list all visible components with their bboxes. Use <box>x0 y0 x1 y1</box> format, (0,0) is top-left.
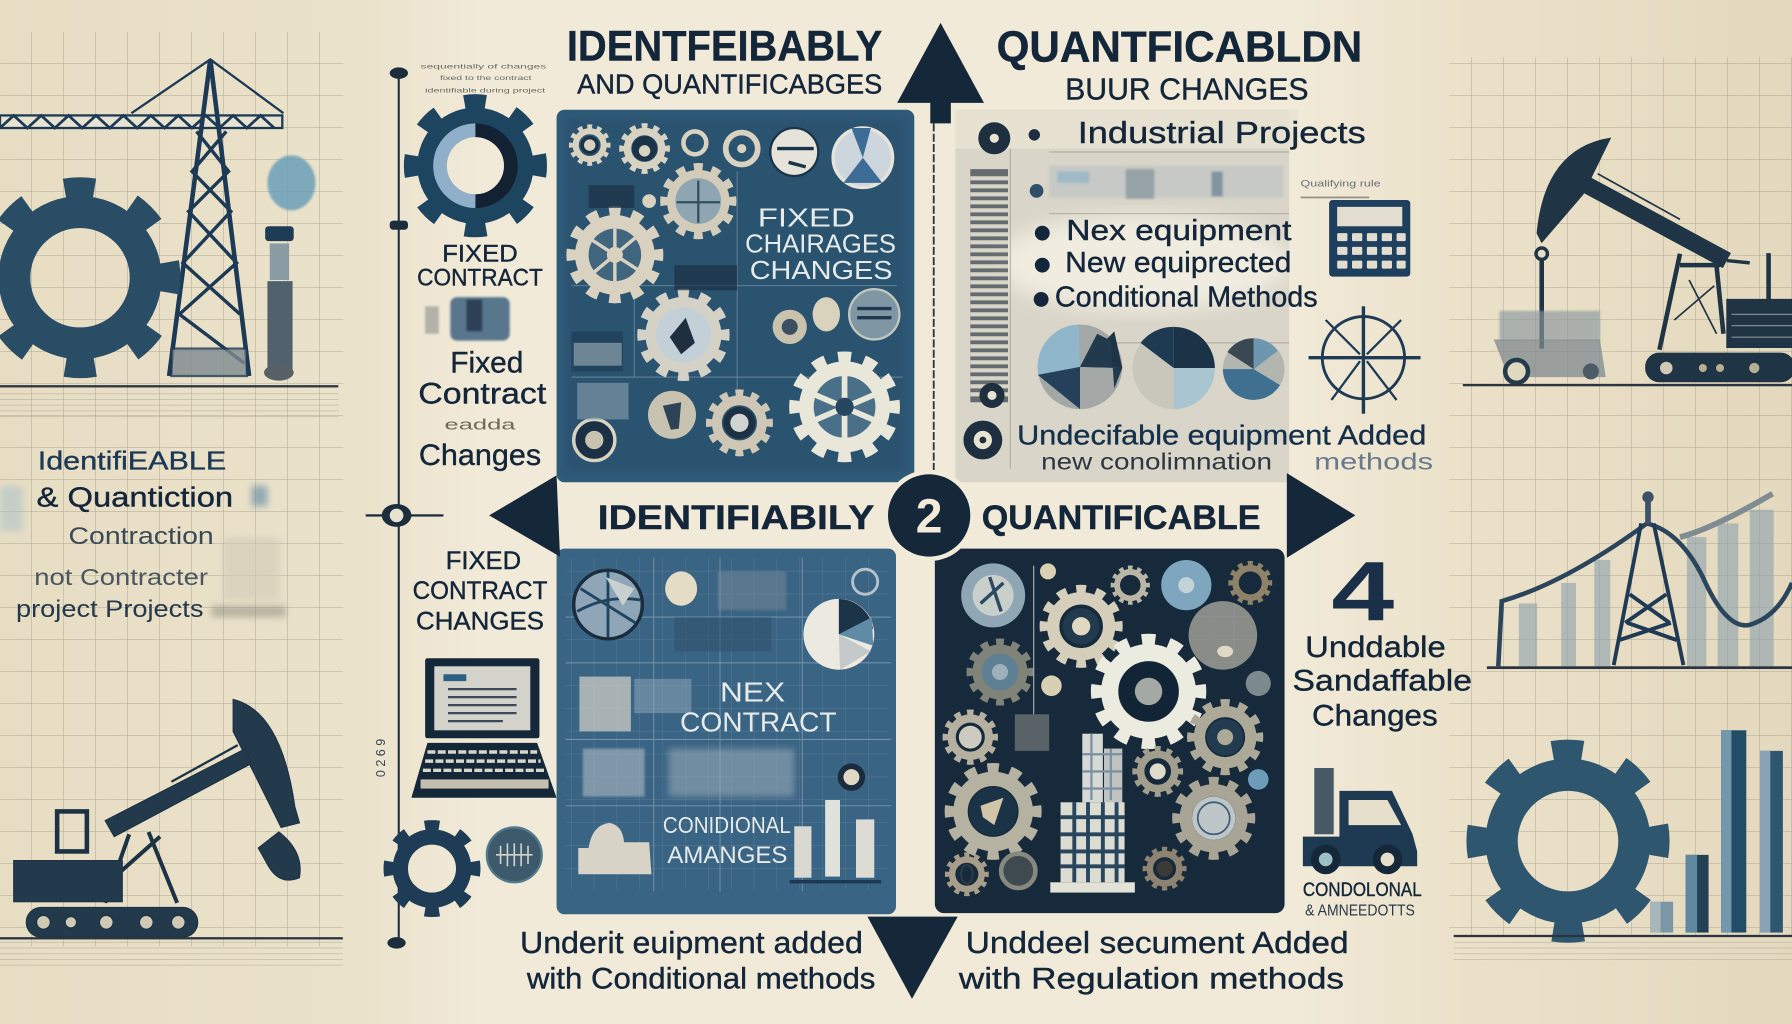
illustration: pumpjack upper right <box>1536 138 1792 382</box>
caption: unddeel secument <box>958 925 1349 996</box>
small discs <box>648 391 696 439</box>
chart disc <box>574 570 642 639</box>
number: 4: 4 <box>1331 544 1394 639</box>
label: undefined standard changes <box>1293 631 1472 733</box>
label: fixed contract changes lower: CONTRACT <box>413 577 547 605</box>
disc <box>838 763 865 791</box>
title: quantifiable: BUUR CHANGES <box>1065 71 1309 106</box>
icon: compass diagram <box>1309 306 1421 414</box>
tiny caption notes: sequentially of changes <box>421 64 547 71</box>
label: identifiably: IDENTIFIABILY <box>598 499 874 537</box>
label: fixed contract changes: eadda <box>445 418 517 434</box>
pie chart 2 <box>1133 327 1215 409</box>
panel text: conditional changes: CONIDIONAL <box>663 812 791 838</box>
ground line right bottom <box>1454 935 1792 937</box>
timeline: left vertical axis <box>366 67 443 949</box>
label: undefined standard changes: Unddable <box>1305 631 1446 664</box>
ground line right top <box>1463 384 1792 386</box>
list: equipment items: New equiprected <box>1065 247 1291 279</box>
text block: left side summary: IdentifiEABLE <box>38 446 226 476</box>
arrow: right <box>1287 473 1355 558</box>
illustration: pumpjack lower left <box>14 699 300 937</box>
illustration: chart with derrick <box>1498 491 1792 666</box>
panel text: fixed changes: CHANGES <box>750 255 893 285</box>
panel text: undecifable equipment: Undecifable equipment Added <box>1017 420 1426 451</box>
faded blueprint marks <box>0 486 286 617</box>
text block: left side summary: not Contracter <box>34 564 208 590</box>
label: conditional amendments <box>1303 879 1422 919</box>
tiny caption notes: identifiable during project <box>425 88 545 95</box>
label: fixed contract changes lower: CHANGES <box>416 608 544 636</box>
panel text: fixed changes: CHAIRAGES <box>745 229 896 259</box>
arrow: up <box>897 23 984 123</box>
small discs <box>853 569 878 594</box>
caption: underit equipment: Underit euipment added <box>520 925 863 960</box>
center badge: 2 <box>916 491 942 544</box>
panel text: new contract: CONTRACT <box>680 706 837 737</box>
notes right of top right panel <box>1301 178 1381 198</box>
faded cart <box>1494 311 1606 383</box>
icon: small gear <box>390 826 474 911</box>
icon: half gear <box>413 103 538 228</box>
building <box>1050 734 1135 893</box>
panel text: conditional changes: AMANGES <box>667 842 787 869</box>
panel text: undecifable equipment: methods <box>1314 449 1433 475</box>
panel: bottom right dark <box>935 549 1285 913</box>
title: identifiable: IDENTFEIBABLY <box>567 23 882 70</box>
panel: bottom left blue <box>557 549 896 914</box>
caption: unddeel secument: with Regulation methods <box>958 963 1344 996</box>
list: equipment items: Nex equipment <box>1066 215 1291 247</box>
panel: top right light <box>955 110 1433 482</box>
panel text: conditional changes <box>663 812 791 869</box>
pie chart 1 <box>1038 325 1122 409</box>
blob <box>665 571 697 606</box>
panel text: new contract: NEX <box>720 677 785 708</box>
cylinders <box>790 800 881 883</box>
icon: gauge disc <box>487 827 542 882</box>
barcode strip <box>970 169 1008 402</box>
arrow: down <box>867 917 958 999</box>
label: fixed contract changes: Fixed <box>450 347 523 380</box>
center badge <box>883 470 975 561</box>
caption: unddeel secument: Unddeel secument Added <box>966 925 1349 960</box>
label: quantifiable: QUANTIFICABLE <box>982 499 1261 537</box>
notes right of top right panel: Qualifying rule <box>1301 178 1381 188</box>
illustration: blue blob and chimney <box>264 155 315 381</box>
arrow: left <box>489 475 560 557</box>
panel text: fixed changes: FIXED <box>758 202 855 232</box>
title: identifiable <box>567 23 882 100</box>
list: equipment items <box>1034 215 1318 313</box>
text block: left side summary: project Projects <box>16 596 203 623</box>
illustration: large right gear <box>1479 753 1657 930</box>
ground line left top <box>0 385 338 387</box>
icon: truck <box>1303 768 1417 874</box>
vertical divider top <box>933 123 935 480</box>
caption: underit equipment: with Conditional methods <box>526 963 875 996</box>
text block: left side summary: & Quantiction <box>37 481 233 512</box>
label: conditional amendments: CONDOLONAL <box>1303 879 1422 901</box>
ground line left bottom <box>0 937 343 939</box>
illustration: crane tower <box>0 59 283 376</box>
timeline: left vertical axis: 0 2 6 9 <box>374 739 388 777</box>
large gears <box>665 168 731 234</box>
panel text: new contract <box>680 677 837 737</box>
label: fixed contract changes lower: FIXED <box>446 547 521 575</box>
text block: left side summary: Contraction <box>69 523 214 550</box>
icon: small machine <box>425 297 510 341</box>
label: undefined standard changes: Sandaffable <box>1293 664 1472 697</box>
label: conditional amendments: & AMNEEDOTTS <box>1305 902 1415 919</box>
pie chart 3 <box>1223 338 1285 400</box>
top row gears <box>572 126 893 187</box>
bar chart right <box>1650 730 1783 933</box>
pie chart white <box>803 599 874 670</box>
text block: left side summary <box>16 446 233 623</box>
faded blocks <box>579 571 794 797</box>
factory <box>578 823 651 874</box>
panel: top left blue <box>557 110 914 482</box>
icon: calculator <box>1329 200 1410 277</box>
label: fixed contract changes <box>418 347 547 472</box>
tiny caption notes <box>421 64 547 95</box>
label: fixed contract changes: Contract <box>418 377 547 410</box>
label: fixed contract upper: FIXED <box>442 241 518 268</box>
list: equipment items: Conditional Methods <box>1055 281 1318 313</box>
faded row <box>1049 166 1283 199</box>
illustration: large left gear <box>0 190 167 365</box>
label: fixed contract changes lower <box>413 547 547 636</box>
panel text: fixed changes <box>745 202 896 285</box>
panel icons: discs <box>963 122 1043 459</box>
title: quantifiable <box>997 24 1362 106</box>
icon: laptop <box>411 658 557 798</box>
label: fixed contract changes: Changes <box>419 439 541 472</box>
panel text: undecifable equipment <box>1017 420 1433 475</box>
heading: industrial projects: Industrial Projects <box>1078 115 1366 150</box>
title: identifiable: AND QUANTIFICABGES <box>577 69 882 100</box>
label: fixed contract upper <box>417 241 543 292</box>
small bar block <box>1015 714 1049 751</box>
title: quantifiable: QUANTFICABLDN <box>997 24 1362 72</box>
label: undefined standard changes: Changes <box>1312 700 1438 733</box>
caption: underit equipment <box>520 925 875 996</box>
gears <box>946 560 1271 893</box>
ground line right mid <box>1487 666 1792 669</box>
label: fixed contract upper: CONTRACT <box>417 265 543 292</box>
panel text: undecifable equipment: new conolimnation <box>1041 449 1272 475</box>
tiny caption notes: fixed to the contract <box>440 75 532 82</box>
